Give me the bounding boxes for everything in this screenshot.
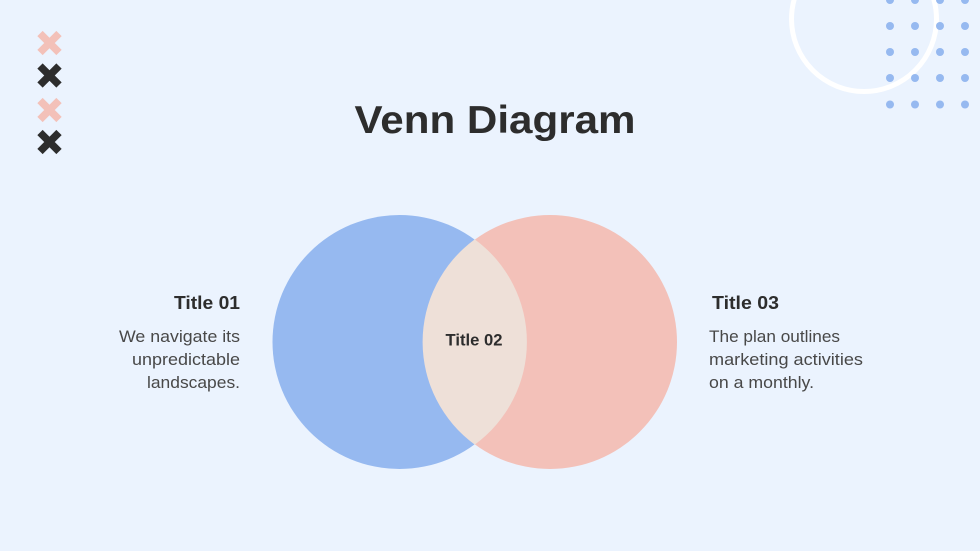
decorative ring xyxy=(792,0,936,92)
venn diagram xyxy=(272,215,677,469)
overlap xyxy=(423,239,527,445)
right text block: on a monthly. xyxy=(709,373,814,392)
right circle xyxy=(423,215,677,469)
right text block: The plan outlines xyxy=(709,327,840,346)
right text block: marketing activities xyxy=(709,350,863,369)
dot grid xyxy=(886,0,969,108)
left text block xyxy=(119,292,240,392)
left text block: We navigate its xyxy=(119,327,240,346)
title: Venn Diagram xyxy=(354,99,636,142)
left text block: unpredictable xyxy=(132,350,240,369)
left circle xyxy=(272,215,526,469)
right text block xyxy=(709,292,863,392)
label: Title 02: Title 02 xyxy=(446,332,502,350)
right text block: Title 03 xyxy=(712,292,779,313)
left text block: Title 01 xyxy=(174,292,240,313)
left text block: landscapes. xyxy=(147,373,240,392)
cross icons xyxy=(40,34,59,152)
